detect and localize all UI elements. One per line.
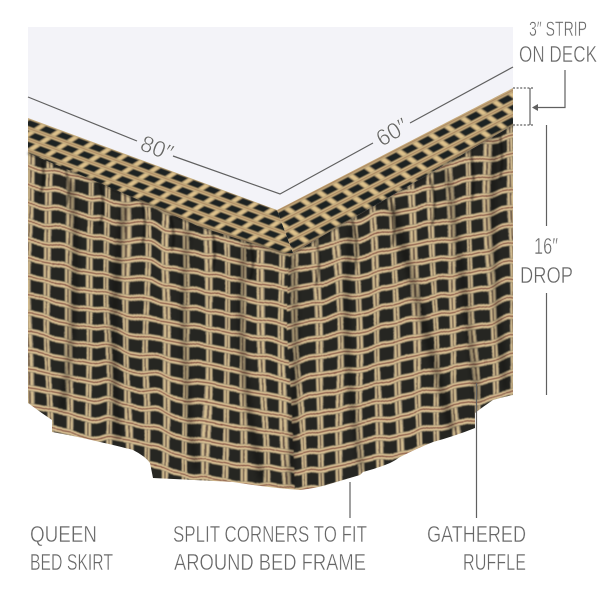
strip label bbox=[519, 18, 597, 67]
gathered ruffle label: RUFFLE bbox=[463, 549, 526, 575]
80 inch label: 80″ bbox=[137, 130, 177, 166]
ruffle drop fabric bbox=[28, 125, 513, 490]
split corners label bbox=[173, 521, 367, 575]
ruffle seam shadow bbox=[28, 125, 513, 253]
80 inch measure line bbox=[28, 67, 513, 194]
gathered ruffle pointer bbox=[476, 383, 478, 518]
split corners pointer bbox=[349, 482, 351, 518]
gather creases bbox=[40, 135, 502, 285]
queen bed skirt label: BED SKIRT bbox=[30, 549, 113, 575]
drop label bbox=[520, 233, 573, 288]
split corners label: AROUND BED FRAME bbox=[174, 549, 366, 575]
queen bed skirt label bbox=[30, 521, 113, 575]
60 inch label: 60″ bbox=[371, 112, 413, 152]
strip bracket bbox=[513, 88, 533, 125]
queen bed skirt label: QUEEN bbox=[30, 521, 97, 547]
bed skirt bbox=[26, 88, 514, 490]
right deck strip bbox=[277, 88, 513, 253]
split corners label: SPLIT CORNERS TO FIT bbox=[173, 521, 367, 547]
left deck strip bbox=[28, 118, 293, 253]
drop label: 16″ bbox=[534, 233, 558, 259]
drop label: DROP bbox=[520, 262, 573, 288]
gathered ruffle label bbox=[427, 521, 526, 575]
mattress deck bbox=[28, 27, 513, 210]
drop measure line bbox=[546, 125, 548, 395]
gathered ruffle label: GATHERED bbox=[427, 521, 526, 547]
strip arrow bbox=[532, 70, 565, 111]
